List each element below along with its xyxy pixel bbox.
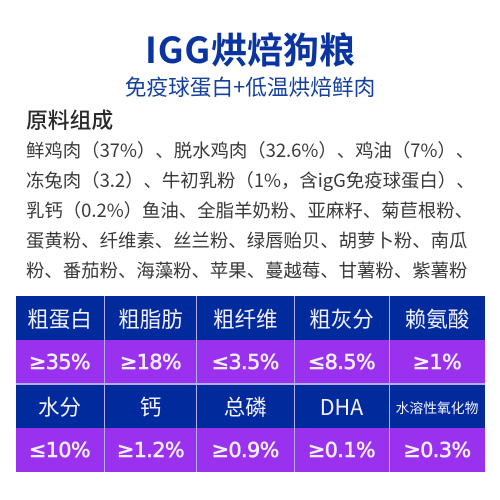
row 2 labels: 钙 <box>140 391 161 422</box>
title: IGG烘焙狗粮 <box>145 22 355 74</box>
ingredients text block: 乳钙（0.2%）鱼油、全脂羊奶粉、亚麻籽、菊苣根粉、 <box>26 197 473 223</box>
row 1 labels: 粗蛋白 <box>27 302 92 334</box>
ingredients text block: 冻兔肉（3.2）、牛初乳粉（1%，含igG免疫球蛋白）、 <box>26 167 475 193</box>
row 2 values <box>16 428 485 472</box>
row 2 labels <box>16 385 485 428</box>
row 2 values: ≥0.1% <box>308 438 375 462</box>
row 1 values: ≥18% <box>120 350 181 374</box>
row 2 labels: 总磷 <box>224 391 267 422</box>
ingredients text block: 鲜鸡肉（37%）、脱水鸡肉（32.6%）、鸡油（7%）、 <box>26 137 474 163</box>
row 1 values: ≤8.5% <box>308 350 375 374</box>
row 1 labels <box>16 296 485 340</box>
ingredients text block <box>26 137 475 283</box>
row 2 values: ≥1.2% <box>117 438 184 462</box>
heading: ingredients: 原料组成 <box>26 104 113 135</box>
row 1 labels: 粗纤维 <box>213 302 278 334</box>
row 2 values: ≥0.9% <box>212 438 279 462</box>
row 1 labels: 粗灰分 <box>309 302 374 334</box>
row 1 values: ≥1% <box>413 350 461 374</box>
row 2 labels: 水分 <box>38 391 81 422</box>
row 1 labels: 赖氨酸 <box>405 302 469 334</box>
nutrient table <box>16 296 484 472</box>
row 2 values: ≥0.3% <box>403 438 471 462</box>
subtitle: 免疫球蛋白+低温烘焙鲜肉 <box>125 71 375 102</box>
row 1 labels: 粗脂肪 <box>118 302 183 334</box>
row 2 labels: 水溶性氧化物 <box>396 396 478 416</box>
row 1 values: ≤3.5% <box>212 350 279 374</box>
row 2 values: ≤10% <box>29 438 90 462</box>
ingredients text block: 蛋黄粉、纤维素、丝兰粉、绿唇贻贝、胡萝卜粉、南瓜 <box>26 227 467 253</box>
row 2 labels: DHA <box>320 391 363 422</box>
row 1 values <box>16 340 485 383</box>
ingredients text block: 粉、番茄粉、海藻粉、苹果、蔓越莓、甘薯粉、紫薯粉 <box>26 257 467 283</box>
row 1 values: ≥35% <box>29 350 90 374</box>
